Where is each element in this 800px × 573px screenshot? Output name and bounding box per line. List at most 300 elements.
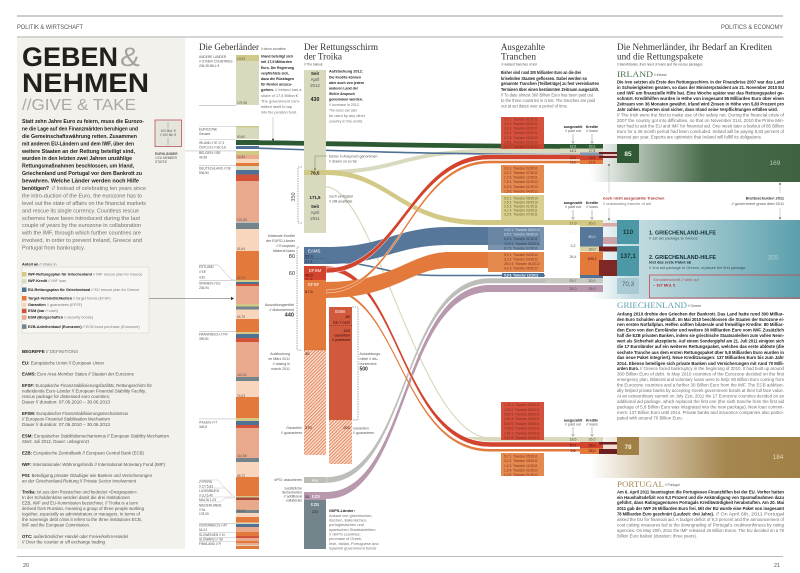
Label: European bilateral loans: sPSI: assoziieren xyxy=(274,478,302,482)
ESM block with guarantees hatch: mittel // dis- xyxy=(360,357,379,361)
Troika note: // Increase in 2012. xyxy=(329,102,360,107)
text: Greece: package of 5,8 Billion Euro was integrated into the new package). New loan commit- xyxy=(617,404,785,410)
Greece value blocks: 137,1 xyxy=(620,253,636,260)
Portugal paid and loan rows: 26,0 xyxy=(588,438,596,442)
GIIPS note: GIIPS-Länder: xyxy=(329,508,355,513)
donor bar column: 179,38 xyxy=(237,101,247,105)
donor bar column: 52,13 xyxy=(237,276,245,280)
label: government gross debt 2011 xyxy=(732,182,785,220)
tranches intro text: out at set dates over a period of time. xyxy=(501,104,568,108)
column labels with arrows: paid out and loans: ausgezahlt xyxy=(564,418,583,422)
Ireland paid and loan rows: 17,5 xyxy=(589,149,595,153)
Label: European bilateral loans: collaterals xyxy=(286,498,302,502)
Ireland contribution note with pointer: dazu die Rücklagen xyxy=(261,76,294,81)
column labels with arrows: paid out and loans: // paid out xyxy=(565,205,581,209)
column labels with arrows: paid out and loans xyxy=(564,125,598,436)
intro text: and rescue its single currency. Countless rescue xyxy=(22,208,140,214)
label: outstanding tranches of aid: // outstanding tranche of aid xyxy=(603,201,651,206)
definitions: together, especially as administrators or managers. In terms of xyxy=(22,512,141,516)
legend: Garantien // guarantees (EFSF) xyxy=(28,303,83,307)
EZB blocks: 220 xyxy=(312,509,319,514)
tranche block: Ireland orange: 3,6 1. Tranche 02/2011 xyxy=(504,166,538,170)
tranche block: Portugal red: 2,80 4. Tranche 09/2011 xyxy=(504,417,540,421)
title xyxy=(22,42,149,114)
donor country labels: SLOWENIEN // SI xyxy=(199,533,225,537)
Ireland contribution note with pointer: Irland beteiligt sich xyxy=(261,54,293,58)
text: Ireland: Zeitraum von 36 Monaten gewährt. Irland wird Zinsen in Höhe von 5,83 Prozent pro xyxy=(617,101,784,106)
scale box: 100 Mrd €: 100 Mrd. € xyxy=(160,129,176,133)
legend: IWF-Kredit // IMF loan xyxy=(28,279,66,283)
column labels with arrows: paid out and loans: ausgezahlt xyxy=(564,125,583,129)
text: Portugal: 2011 gab der IWF 26 Milliarden Euro frei. Mit der EU wurde eine Paket von insgesamt xyxy=(617,506,785,511)
text: Greece: half die EZB privaten Banken, indem sie griechische Staatsanleihen zum vollen Nenn- xyxy=(617,333,785,338)
donor country labels: SPANIEN // ES xyxy=(199,282,221,286)
tranche block: Ireland orange: 3,0 2. Tranche 07/2011 xyxy=(504,171,538,175)
legend leader arrow xyxy=(149,297,234,300)
GIIPS note: Ankauf von griechischen, xyxy=(329,513,372,518)
Label: European bilateral loans: // raising in xyxy=(273,362,290,366)
column heading: Der Rettungsschirm der Troika: // The bailout xyxy=(304,62,322,66)
column labels with arrows: paid out and loans: Kredite xyxy=(586,418,598,422)
title: NEHMEN xyxy=(22,68,149,98)
label: outstanding tranches of aid xyxy=(603,164,665,220)
tranche block: Greece blue: 10,9 4. Tranche 03/2011 xyxy=(504,242,540,246)
intro text: involved, in order to prevent Ireland, Greece and xyxy=(22,238,142,244)
tranche block: Portugal red: 5,80 3. Tranche 09/2011 xyxy=(504,412,540,416)
Ireland contribution note with pointer: share of 17,5 Billion €. xyxy=(261,93,299,98)
column heading: Ausgezahlte Tranchen: Tranchen xyxy=(501,52,536,62)
page header: POLITIK & WIRTSCHAFT xyxy=(17,24,83,31)
column heading: Der Rettungsschirm der Troika: Der Rettungsschirm xyxy=(304,42,379,53)
donor country labels: IRLAND // IE 17,3 xyxy=(199,141,225,145)
text: Greece xyxy=(616,312,785,420)
EZB blocks: 35 xyxy=(305,495,309,499)
flow: thin blue to Greece xyxy=(326,262,545,276)
text: Ireland: Die Iren setzten als Erste den Rettungsschirm. In der Finanzkrise 2007 war das Land xyxy=(617,79,784,84)
EAMS block xyxy=(304,247,326,264)
flow: grey PSI to Greece xyxy=(326,278,581,483)
donor bar column: 51,64 xyxy=(237,247,245,251)
tranche block: Greece tan: 2,5 2. Tranche 09/2010 xyxy=(504,200,538,204)
definitions: Dauer // duration: 07.06.2010 – 30.06.2013 xyxy=(22,422,110,427)
text: Ireland: Euro for a 36 month period had been concluded. Ireland will be paying 5,83 percent of xyxy=(617,129,785,134)
definitions: notleidende Euro-Länder // European Financial Stability Facility, xyxy=(22,388,146,394)
tranche block: Ireland red: 4,3 7. Tranche 01/2012 xyxy=(504,145,538,149)
scale box: 100 Mrd €: EUROLÄNDER xyxy=(155,152,178,156)
tranche block: Greece orange: 5,8 6. Tranche 12/2011 xyxy=(504,274,539,278)
Troika main bar: Seit xyxy=(311,71,320,76)
flow: thin light IMF Portugal xyxy=(326,187,581,438)
sankey flows xyxy=(236,142,590,499)
tranche block: Greece orange: 5,9 1. Tranche 03/2012 xyxy=(504,253,538,257)
donor country labels: 236,94 xyxy=(199,286,209,290)
Greece paid and loan rows: 52,9 xyxy=(570,230,576,234)
Greece aid packages: // 2nd aid package to Greece, replaces the first package xyxy=(649,265,745,270)
text: Greece: the Eurozone countries and a further 30 Billion Euro from the IMF. The ECB addition- xyxy=(617,382,785,388)
donor country labels: MALTA 1,03 xyxy=(199,498,216,502)
Portugal paid and loan rows: 18,6 xyxy=(570,438,576,442)
title: GEBEN xyxy=(22,42,118,72)
donor country labels: FRANKREICH // FR xyxy=(199,332,228,336)
tranche block: Portugal orange: 5,7 1. Tranche 05/2011 xyxy=(504,454,538,458)
donor country labels: ESTLAND xyxy=(199,265,214,269)
donor bar column: 114,56 xyxy=(237,454,247,458)
text: Ireland: und IWF um finanzielle Hilfe bat. Eine Woche später war das Rettungspaket ge- xyxy=(617,90,785,95)
text: Portugal: cost cutting measures led to the downgrading of Portugal's creditworthiness by rating xyxy=(617,522,785,528)
intro text: // Instead of celebrating ten years since xyxy=(52,186,147,192)
Troika note: country in the world. xyxy=(329,118,363,124)
intro text: Statt zehn Jahre Euro zu feiern, muss die Eurozo- xyxy=(22,119,144,125)
definitions: Dauer // duration: 07.06.2010 – 30.06.2013 xyxy=(22,400,110,404)
Label: European bilateral loans: bilaterale Kredite xyxy=(268,234,295,238)
EFSM block: EFSM xyxy=(309,268,322,273)
Label: European bilateral loans: zusätzliche xyxy=(284,486,302,490)
donor country labels: // LU 5,40 xyxy=(199,494,213,498)
text: Ireland xyxy=(617,79,785,140)
text: Greece: 2014. Ebenso beteiligen sich private Banken und Versicherungen mit rund 70 Milli- xyxy=(617,361,785,366)
heading: Portugal: PORTUGAL xyxy=(617,479,664,489)
Ireland contribution note with pointer: mit 17,5 Milliarden xyxy=(261,59,292,64)
donor bar column: 13,93 xyxy=(237,57,245,61)
definitions: EFSF: Europäische Finanzstabilisierungsfazilität, Rettungsschirm für xyxy=(22,383,152,388)
EFSM block: 11,5 xyxy=(305,277,313,282)
Troika main bar: 78,5 xyxy=(311,170,320,176)
definitions: EFSM: Europäischer Finanzstabilisierungsmechanismus xyxy=(22,411,129,416)
Greece paid and loan rows: 38,4 xyxy=(570,255,576,259)
EFSF block with guarantees hatch: 370 xyxy=(305,425,312,430)
donor country labels: 44,58 xyxy=(199,156,207,160)
Greece paid and loan rows xyxy=(545,220,617,292)
column labels with arrows: paid out and loans: // loans xyxy=(586,129,598,133)
definitions: EAMS: Euro Area Member States // Staaten der Eurozone xyxy=(22,372,134,376)
intro text xyxy=(21,119,147,252)
tranche block: Ireland orange: 0,5 5. Tranche 01/2012 xyxy=(504,185,538,189)
EFSF block with guarantees hatch xyxy=(304,280,326,455)
donor country labels: EUROZONE xyxy=(199,128,217,132)
tranche block: Ireland red: 1,5 6. Tranche 01/2012 xyxy=(504,140,538,144)
EFSM block xyxy=(304,266,326,282)
definitions: EZB: Europäische Zentralbank // European Central Bank (ECB) xyxy=(22,450,144,456)
column heading: Der Rettungsschirm der Troika xyxy=(304,42,379,66)
tranche block: Greece tan: 2,5 3. Tranche 01/2011 xyxy=(504,204,538,208)
scale box: 100 Mrd €: // 100 bill. € xyxy=(160,133,176,137)
tranche block: Greece blue: 6,5 3. Tranche 01/2011 xyxy=(504,237,538,241)
ESM block with guarantees hatch: 200 xyxy=(343,425,351,430)
annotations on Troika bar xyxy=(291,154,378,223)
Greece value blocks: 70,3 xyxy=(622,281,635,288)
donor country labels: 506,84 xyxy=(199,171,209,175)
tranche block: Ireland red: 0,7 5. Tranche 09/2011 xyxy=(504,136,538,140)
text: Greece: das neue Paket integriert). Neue Kreditzusagen: 137 Milliarden Euro bis zum Jahr xyxy=(617,355,784,360)
Greece paid and loan rows: 80,0 xyxy=(588,235,596,239)
flow: tan IMF Greece xyxy=(326,170,581,225)
column labels with arrows: paid out and loans: // paid out xyxy=(565,422,581,426)
annotations on Troika bar: // still available xyxy=(329,200,352,204)
donor country labels: // NL xyxy=(199,508,206,512)
Ireland paid and loan rows: 22,5 xyxy=(589,156,595,160)
ESM block with guarantees hatch: // promised xyxy=(332,338,350,342)
tranche block: Greece blue xyxy=(488,227,544,250)
donor bar column: 74,03 xyxy=(237,394,245,398)
Ireland contribution note with pointer: verpflichtete sich, xyxy=(261,70,289,75)
Troika note: anderen Land der xyxy=(329,86,358,90)
column heading: Der Rettungsschirm der Troika: der Troika xyxy=(304,52,343,62)
Portugal paid and loan rows xyxy=(570,437,617,454)
donor country labels: ÖSTLICH // SK 6,8 xyxy=(199,146,226,150)
tranches intro text: kriselnden Staaten geflossen. Dabei werden so xyxy=(501,76,587,81)
GIIPS note: portugiesischen und xyxy=(329,522,364,527)
text: Ireland: Jahr zahlen. Experten sind sicher, dass Irland seine Verpflichtungen erfüllen wird. xyxy=(617,107,778,112)
intro text: mit anderen EU-Ländern und dem IWF, über den xyxy=(22,141,134,147)
flow: purple EZB to Greece xyxy=(326,285,581,499)
Greece aid packages: 1. GRIECHENLAND-HILFE xyxy=(649,230,716,236)
EFSF block with guarantees hatch: 67,5 xyxy=(305,289,314,294)
tranche block: Greece blue: 8,7 5. Tranche 07/2011 xyxy=(504,246,538,250)
Greece value blocks: 110 xyxy=(623,229,634,236)
Greece paid and loan rows: 3,2 xyxy=(570,244,576,248)
ESM block with guarantees hatch: 80 xyxy=(346,314,351,319)
Greece paid and loan rows: 39,0 xyxy=(588,248,596,252)
scale box: 100 Mrd €: // EU MEMBER xyxy=(155,156,178,160)
gradient band: Portugal gross debt xyxy=(590,437,800,478)
Greece aid packages xyxy=(649,230,779,270)
text: Greece: Anfang 2010 drohte den Griechen der Bankrott. Das Land hatte rund 300 Milliar- xyxy=(617,312,785,316)
flow: light band into Portugal row xyxy=(466,437,581,442)
tranche block: Portugal red: 7,08 6. Tranche 01/2012 xyxy=(504,427,540,431)
heading: Irland: // Ireland xyxy=(654,73,667,77)
donor bar column: 32,04 xyxy=(237,509,245,513)
intro text: the intro-duction of the Euro, the eurozone has to xyxy=(22,193,143,199)
text: Greece: 300 Billion Euro of debt. In May 2010 countries of the Eurozone decided on the first xyxy=(617,372,785,376)
donor country labels: 345,8 xyxy=(199,425,207,429)
text: Greece: sechste Tranche aus dem ersten Rettungspaket über 5,8 Milliarden Euro wurden in xyxy=(617,350,784,355)
text: Portugal: geführt, dass Ratingagenturen Portugals Kreditwürdigkeit herabstuften. Am 20. Mai xyxy=(617,500,784,505)
heading: Irland xyxy=(617,69,667,79)
tranche block: Portugal orange: 1,0 3. Tranche 12/2011 xyxy=(504,464,538,468)
column heading: Die Nehmerländer: Die Nehmerländer, ihr Bedarf an Krediten xyxy=(617,42,772,53)
EAMS block: 27,1 xyxy=(305,259,314,264)
intro text: Rettungsmaßnahmen beschlossen, um Irland, xyxy=(22,164,134,170)
definitions: // European Financial Stabilisation Mechanism xyxy=(22,416,110,422)
Troika note xyxy=(329,68,366,124)
Portugal value blocks: 78 xyxy=(624,444,632,451)
label: outstanding tranches of aid: noch nicht ausgezahlte Tranchen xyxy=(603,196,665,200)
donor bar column: 65,72 xyxy=(237,474,245,478)
tranche block: Portugal red xyxy=(501,402,544,440)
GIIPS note: // GIIPS countries: xyxy=(329,532,361,536)
Label: European bilateral loans: // additional xyxy=(284,494,302,498)
donor country labels: // CY 5,81 xyxy=(199,484,213,488)
legend: ESM (bar // cash) xyxy=(28,309,59,313)
tranche block: Ireland orange: 1,0 3. Tranche 12/2011 xyxy=(504,176,538,180)
Portugal value blocks xyxy=(617,437,784,461)
tranches intro text: genannte Tranchen (Teilbeträge) zu fest vereinbarten xyxy=(501,81,599,86)
EAMS block: 52,9 xyxy=(305,254,314,258)
Greece aid packages: // 1st aid package to Greece xyxy=(649,236,698,240)
Ireland contribution note with pointer: The government com- xyxy=(261,98,301,103)
donor country labels: ANDERE LÄNDER xyxy=(199,55,227,59)
tranches intro text xyxy=(501,70,599,108)
Greece paid and loan rows: 35,0 xyxy=(588,287,596,291)
text: Ireland: interest per year. Experts are optimistic that Ireland will fulfill its obligations. xyxy=(617,135,762,140)
text: Ireland: // The Irish were the first to make use of the safety net. During the financial crisis of xyxy=(617,112,785,117)
Troika main bar: 430 xyxy=(311,97,319,103)
page footer xyxy=(17,556,783,569)
donor country labels: NIEDERLANDE xyxy=(199,504,222,508)
donor country labels: ITALIEN // IT xyxy=(199,420,217,424)
intro text: bewahren. Welche Länder werden noch Hilfe xyxy=(22,179,140,185)
text: Greece: ment: 137 Billion Euro until 2014. Private banks and insurance companies also partici- xyxy=(617,410,785,415)
intro text: level out the state of affairs on the financial markets xyxy=(22,201,146,207)
intro text: couple of years by the eurozone in collaboration xyxy=(22,223,141,229)
Label: European bilateral loans: der EURO-Länder xyxy=(266,239,296,243)
text: Greece: den Euro Schulden angehäuft. Im Mai 2010 beschlossen die Staaten der Eurozone ei- xyxy=(617,317,785,322)
tranches intro text: to the three countries in crisis. The tranches are paid xyxy=(501,98,596,103)
legend: Target-Verbindlichkeiten // target bonds (EFSF) xyxy=(28,296,111,300)
ESM block with guarantees hatch: ESM xyxy=(335,309,345,314)
Ireland paid and loan rows: 17,6 xyxy=(589,160,595,164)
flow: orange EFSF to Portugal xyxy=(326,288,581,452)
text: Portugal: ein Haushaltsdefizit von 9,3 Prozent und die Ankündigung von Sparmaßnahmen dazu xyxy=(617,495,784,500)
tranches intro text: // To date almost 300 Billion Euro has been paid out xyxy=(501,92,594,98)
text: Greece: // Greece faced bankruptcy in the beginning of 2010. It had built up around xyxy=(640,366,785,371)
Greece value blocks xyxy=(617,220,639,294)
tranche block: Greece tan xyxy=(501,195,544,220)
Label: European bilateral loans: Garantien xyxy=(286,426,302,430)
intro text: die Gemeinschaftswährung retten. Zusammen xyxy=(22,134,137,140)
tranche block: Portugal orange: 3,4 2. Tranche 09/2011 xyxy=(504,459,538,463)
GIIPS note: irischen, italienischen, xyxy=(329,518,367,522)
Troika note: Welt in Anspruch xyxy=(329,91,355,96)
text: Greece: den Euro von den Euroländer und weitere 30 Milliarden Euro vom IWF. Zusätzlich xyxy=(617,328,784,332)
Ireland paid and loan rows: 18,4 xyxy=(570,156,576,160)
Ireland contribution note with pointer: gehen. // Ireland has a xyxy=(261,87,302,92)
tranche block: Greece orange xyxy=(488,252,544,278)
donor country labels: ÖSTERREICH // AT xyxy=(199,524,227,528)
column labels with arrows: paid out and loans: Kredite xyxy=(586,201,598,205)
tranche block: Portugal red: 4,75 2. Tranche 05/2011 xyxy=(504,408,540,412)
ESM block with guarantees hatch: bursement xyxy=(360,362,376,366)
donor country labels: 399,81 xyxy=(199,337,209,341)
EAMS block: EAMS xyxy=(308,248,321,254)
donor country labels: 54,24 xyxy=(199,528,207,532)
tranche block: Greece tan: 3,3 5. Tranche 07/2011 xyxy=(504,212,538,216)
definitions: EZB, IWF und EU-Kommission bezeichnet. // Troika is a term xyxy=(22,500,138,506)
text: Ireland: ister had to ask the EU and IMF for financial aid. One week later a bailout of 85 Billion xyxy=(617,123,785,128)
tranche block: Greece orange: 25,0 3. Tranche 04/2012 xyxy=(504,262,540,266)
heading: Portugal: // Portugal xyxy=(665,483,680,487)
text: Greece: At an extraordinary summit on July 21st, 2011 the 17 Eurozone countries decided on an xyxy=(617,394,785,398)
flow: blue EAMS to Greece xyxy=(326,227,540,264)
donor country labels: Gesamt xyxy=(199,132,210,136)
text: Portugal xyxy=(617,490,785,538)
donor country labels: BELGIEN // BE xyxy=(199,151,221,155)
Greece aid packages: löst das erste Paket ab xyxy=(649,260,692,264)
gradient band: Ireland gross debt xyxy=(590,144,800,182)
donor country labels xyxy=(185,55,236,546)
Label: European bilateral loans: march 2011 xyxy=(271,367,290,371)
Greece paid and loan rows: 29,7 xyxy=(570,279,576,283)
tranche block: Ireland red: 3,4 2. Tranche 03/2011 xyxy=(504,122,538,126)
donor country labels: ZYPERN xyxy=(199,480,213,484)
heading: Griechenland: GRIECHENLAND xyxy=(617,300,687,310)
intro text: Griechenland und Portugal vor dem Bankrott zu xyxy=(22,171,142,177)
Label: European bilateral loans: Aufstockung xyxy=(270,352,290,356)
column heading: Ausgezahlte Tranchen: Ausgezahlte xyxy=(501,42,545,53)
Portugal paid and loan rows: 26,0 xyxy=(588,449,596,453)
ESM block with guarantees hatch: Garantien xyxy=(334,334,350,338)
Label: European bilateral loans: Sicherheiten xyxy=(282,490,302,494)
tranche block: Greece blue: 14,5 1. Tranche 05/2010 xyxy=(504,228,540,232)
intro text: weitere Staaten an der Rettung beteiligt sind, xyxy=(21,149,135,155)
legend xyxy=(22,262,149,333)
EFSF block with guarantees hatch: EFSF xyxy=(308,282,320,287)
text: Greece: nen ersten Notfallplan. Helfen sollten bilaterale und freiwillige Kredite: 80 Milliar- xyxy=(617,322,785,327)
Greece paid and loan rows: 17,9 xyxy=(570,222,576,226)
Greece paid and loan rows: 109,1 xyxy=(588,257,596,261)
tranche block: Greece orange: 4,2 4. Tranche 05/2012 xyxy=(504,266,538,270)
definitions: derived from Russian, meaning a group of three people working xyxy=(22,506,144,511)
donor bar column: 101,50 xyxy=(237,218,247,222)
GIIPS note: purchase of Greek, xyxy=(329,536,362,541)
Troika note: genommen werden. xyxy=(329,96,363,102)
definitions: // Over the counter or off exchange trading xyxy=(22,540,105,544)
tranche block: Ireland orange: 7,8 4. Tranche 01/2012 xyxy=(504,180,538,184)
Troika main bar: 171,5 xyxy=(310,195,321,200)
Label: European bilateral loans: im März 2011 xyxy=(268,357,290,361)
tranche block: Portugal orange xyxy=(501,453,544,477)
label: government gross debt 2011: Bruttoschulden 2011 xyxy=(746,196,785,200)
definitions: the sovereign debt crisis it refers to the three institutions ECB, xyxy=(22,517,142,522)
page footer: 21 xyxy=(774,563,780,569)
tranche block: Greece tan: 5,5 1. Tranche 05/2010 xyxy=(504,196,538,200)
definitions xyxy=(22,349,169,544)
Portugal paid and loan rows: 9,6 xyxy=(570,449,576,453)
Ireland value blocks xyxy=(617,144,781,167)
column heading: Ausgezahlte Tranchen: // realised tranches of aid xyxy=(501,62,537,66)
Label: European bilateral loans: 80 xyxy=(289,254,295,260)
text: Portugal: asked the EU for financial aid. A budget deficit of 9,3 percent and the announcement of xyxy=(617,517,785,522)
column labels with arrows: paid out and loans: // paid out xyxy=(565,129,581,133)
GIIPS note: spanischen Staatsanleihen xyxy=(329,527,376,532)
text: Greece: die 17 Euroländer auf ein weiteres Rettungspaket, welches das erste ablöste (die xyxy=(617,344,785,349)
tranche block: Portugal red: 1,75 1. Tranche 05/2011 xyxy=(504,403,540,407)
donor country labels: // OTHER COUNTRIES xyxy=(199,60,232,64)
PSI block xyxy=(304,477,326,483)
text: Greece: arden Euro. xyxy=(617,366,639,371)
text: Portugal: agencies. On May 20th, 2011 the IMF released 26 Billion Euros. The EU decided on a 78 xyxy=(617,528,785,533)
Troika main bar: Seit xyxy=(311,204,320,209)
donor country labels: SLOWAKEI // SK xyxy=(199,538,224,542)
legend: EU-Rettungsplan für Griechenland // EU rescue plan for Greece xyxy=(28,288,139,292)
text: Portugal: // On April 6th, 2011 Portugal xyxy=(716,512,784,516)
definitions: IMF and the European Commission. xyxy=(22,522,90,528)
definitions: OTC: außerbörslicher Handel oder Freiverkehrs-Handel xyxy=(22,534,128,539)
flow: orange EFSF to Greece xyxy=(326,252,540,298)
text: Greece: ally helped private banks by accepting Greek government bonds at their full face value. xyxy=(617,388,784,393)
Label: European bilateral loans: Auszahlungsmittel xyxy=(265,303,294,307)
heading: Griechenland: // Greece xyxy=(688,304,701,308)
debt cut box xyxy=(650,275,800,298)
flow: light IMF Ireland loan xyxy=(326,149,581,174)
Label: European bilateral loans: 60 xyxy=(289,271,295,277)
ESM block with guarantees hatch: // guarantees xyxy=(353,431,374,435)
definitions: ESM: Europäischer Stabilitätsmechanismus // European Stability Mechanism xyxy=(22,434,169,438)
title: //GIVE & TAKE xyxy=(22,97,136,114)
Ireland contribution note with pointer xyxy=(261,54,302,140)
text: Ireland: schnürt. Kredithilfen wurden in Höhe von insgesamt 85 Milliarden Euro über einen xyxy=(617,96,784,101)
page header: POLITICS & ECONOMY xyxy=(721,24,783,31)
